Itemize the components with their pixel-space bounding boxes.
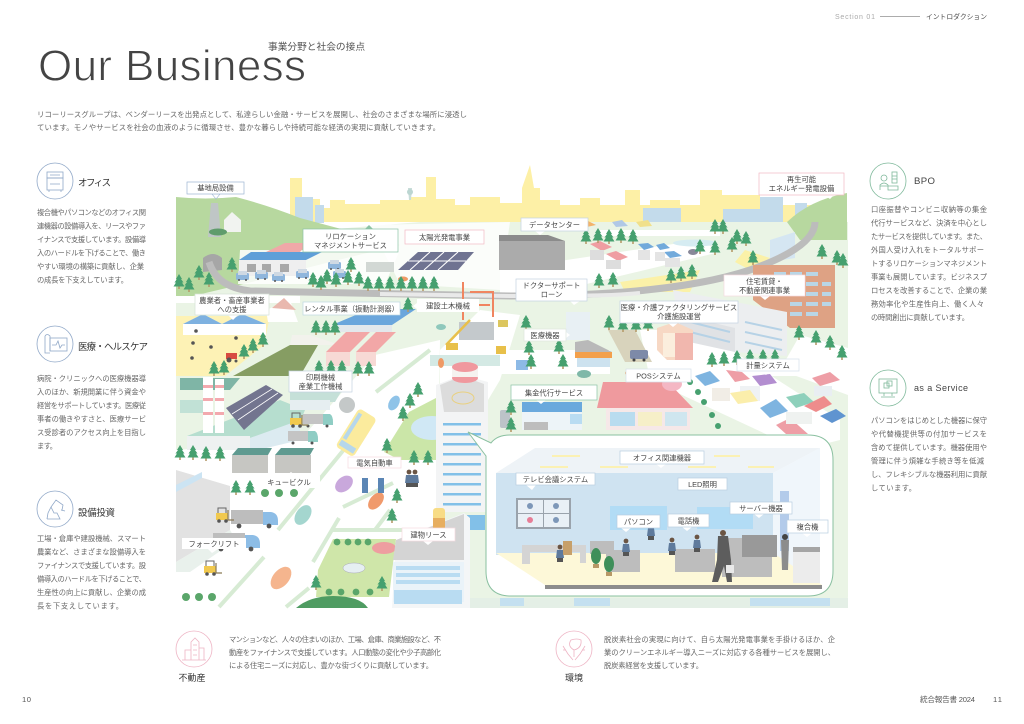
solar farm (398, 252, 474, 270)
panel: equipment investment: 設備投資 (78, 507, 115, 518)
label: EV (348, 457, 401, 472)
label: printing machinery: 印刷機械 (306, 373, 336, 382)
label: building lease (402, 528, 455, 545)
label: relocation: マネジメントサービス (314, 241, 387, 250)
footer: page numbers (22, 694, 1002, 704)
panel: BPO: の時間創出に貢献しています。 (871, 313, 969, 322)
panel: as a Service (870, 370, 988, 492)
floor (496, 553, 822, 585)
panel: medical: 入のほか、新規開業に伴う資金や (37, 388, 146, 396)
footer: page numbers: 統合報告書 2024 (920, 694, 975, 704)
label: factoring: 医療・介護ファクタリングサービス (621, 303, 737, 312)
panel: equipment investment: ファイナンスで支援しています。設 (37, 561, 147, 570)
label: PC: パソコン (624, 518, 653, 526)
panel: BPO: トするリロケーションマネジメント (871, 259, 987, 268)
cubicles (232, 448, 314, 473)
panel: environment: 業のクリーンエネルギー導入ニーズに対応する各種サービスを展開し、 (604, 648, 835, 657)
video wall (516, 498, 571, 529)
distant towers (295, 197, 807, 231)
label: building lease: 建物リース (410, 530, 447, 540)
icon: robot arm (37, 491, 73, 527)
label: cubicle: キュービクル (267, 478, 311, 487)
panel: real estate: 動産をファイナンスで支援しています。人口動態の変化や少子高齢化 (229, 648, 442, 657)
panel: as a Service: し、フレキシブルな機器利用に貢献 (871, 470, 988, 479)
panel: BPO (870, 163, 988, 322)
callout: office interior bubble (468, 432, 833, 596)
clinic (657, 322, 693, 360)
label: PC (617, 515, 660, 532)
left warehouse (176, 470, 236, 572)
label: relocation: リロケーション (325, 232, 376, 241)
forklifts (204, 413, 308, 576)
panel: BPO: 外国人受け入れをトータルサポー (871, 246, 984, 254)
panel: medical: 病院・クリニックへの医療機器導 (37, 374, 147, 383)
label: office equipment: オフィス関連機器 (633, 454, 692, 462)
label: construction machinery (413, 299, 479, 312)
label: doctor support loan (516, 279, 587, 305)
data center (499, 235, 565, 270)
park (182, 489, 396, 608)
label: telephone: 電話機 (678, 516, 700, 526)
label: multifunction printer (787, 520, 828, 537)
elevated highway (209, 222, 815, 296)
label: printing machinery: 産業工作機械 (299, 382, 343, 391)
panel: environment (556, 631, 836, 683)
label: collection agency: 集金代行サービス (525, 388, 583, 398)
label: renewable energy (759, 173, 844, 199)
label: medical equipment: 医療機器 (530, 331, 560, 340)
label: POS: POSシステム (636, 372, 681, 380)
panel: BPO: BPO (914, 176, 935, 187)
label: data center: データセンター (529, 220, 580, 230)
panel: as a Service: as a Service (914, 383, 968, 393)
vans (236, 260, 346, 282)
suburbs houses (576, 220, 795, 269)
base station tower and building (208, 203, 241, 237)
ground (176, 222, 848, 608)
green park by hospital (384, 398, 436, 460)
panel: office: 入のハードルを下げることで、働き (37, 248, 146, 258)
label: printing machinery (289, 371, 352, 392)
panel: as a Service: 管理に伴う煩雑な手続き等を低減 (871, 456, 985, 466)
icon: BPO worker (870, 163, 906, 199)
title: Our Business (38, 42, 306, 90)
panel: real estate (176, 631, 442, 683)
label: multifunction printer: 複合機 (797, 522, 819, 532)
label: server: サーバー機器 (739, 504, 784, 513)
label: housing: 住宅賃貸・ (746, 277, 783, 286)
label: rental: レンタル事業（振動計測器） (304, 304, 399, 314)
label: renewable energy: エネルギー発電設備 (769, 184, 835, 193)
label: factoring: 介護施設運営 (657, 312, 701, 321)
panel: equipment investment: 備導入のハードルを下げることで、 (37, 574, 146, 584)
label: POS (626, 369, 691, 382)
label: farmers (195, 294, 269, 320)
office plants (591, 548, 614, 576)
panel: equipment investment: 工場・倉庫や建設機械、スマート (37, 534, 146, 543)
panel: as a Service: 含めて提供しています。機器使用や (871, 443, 987, 452)
label: housing: 不動産関連事業 (739, 286, 791, 295)
intro text: リコーリースグループは、ベンダーリースを出発点として、私達らしい金融・サービスを展開し、社会のさまざまな場所に浸透し (37, 110, 467, 119)
label: cubicle (258, 472, 320, 488)
panel: BPO: 務効率化や生産性向上、働く人々 (871, 300, 984, 308)
label: doctor support loan: ローン (541, 290, 562, 299)
skyline (290, 165, 820, 222)
office workers (556, 523, 789, 582)
label: solar (405, 230, 484, 244)
panel: office: オフィス (78, 177, 111, 188)
label: solar: 太陽光発電事業 (419, 233, 471, 242)
tractor and cows (190, 329, 238, 362)
header: section label (835, 12, 987, 21)
label: doctor support loan: ドクターサポート (523, 281, 580, 290)
label: medical equipment (524, 329, 570, 341)
panel: BPO: 口座振替やコンビニ収納等の集金 (871, 205, 988, 214)
nursing apartment blocks (673, 290, 787, 356)
right wall (773, 448, 820, 585)
panel: environment: 脱炭素社会の実現に向けて、自ら太陽光発電事業を手掛けるほか、企 (604, 635, 836, 644)
label: data center (521, 218, 588, 235)
back wall (496, 473, 773, 555)
panel: office (37, 163, 147, 284)
panel: BPO: 代行サービスなど、決済を中心とし (871, 218, 987, 228)
windows (610, 506, 753, 530)
ceiling (496, 448, 820, 473)
label: farmers: への支援 (217, 305, 247, 314)
label: office equipment (620, 451, 704, 468)
panel: medical: 経営をサポートしています。医療従 (37, 401, 147, 410)
label: LED: LED照明 (688, 480, 717, 489)
icon: medical monitor (37, 326, 73, 362)
people (405, 470, 419, 487)
panel: office: イナンスで支援しています。設備導 (37, 235, 147, 244)
tunnel (203, 254, 222, 272)
icon: buildings (176, 631, 212, 667)
construction site (430, 282, 508, 366)
farm land (176, 298, 340, 376)
small clinic (566, 312, 590, 340)
EV chargers (362, 478, 384, 493)
icon: copier (37, 163, 73, 199)
label: relocation (303, 225, 398, 252)
panel: real estate: 不動産 (178, 672, 206, 683)
trees (174, 219, 848, 591)
subtitle: 事業分野と社会の接点 (268, 40, 365, 53)
label: base station (187, 182, 244, 199)
hills (176, 197, 400, 300)
panel: as a Service: しています。 (871, 484, 916, 492)
convenience store (575, 340, 612, 367)
panel: environment: 脱炭素経営を支援しています。 (604, 661, 703, 670)
yellow plots (620, 270, 700, 292)
brick apartment (753, 265, 835, 328)
white plots and roads (176, 222, 848, 608)
desks and partitions (522, 535, 820, 583)
label: farmers: 農業者・畜産事業者 (199, 296, 265, 305)
label: construction machinery: 建設土木機械 (426, 302, 471, 310)
panel: real estate: による住宅ニーズに対応し、豊かな街づくりに貢献しています。 (229, 661, 433, 670)
panel: BPO: 事業も展開しています。ビジネスプ (871, 272, 988, 282)
panel: medical: 事者の働きやすさと、医療サービ (37, 414, 146, 424)
label: metering (737, 359, 799, 375)
label: video conference: テレビ会議システム (523, 475, 588, 484)
label: renewable energy: 再生可能 (787, 175, 817, 184)
label: forklift: フォークリフト (188, 540, 240, 548)
label: metering: 計量システム (746, 361, 790, 370)
label: LED (678, 478, 727, 490)
pink factories (326, 332, 396, 366)
header: section label: Section 01 (835, 14, 875, 21)
label: housing (724, 275, 805, 300)
trucks (213, 414, 333, 551)
illustration: city map (174, 165, 848, 608)
panel: as a Service: や代替機提供等の付加サービスを (871, 430, 987, 438)
panel: office: の成長を下支えしています。 (37, 276, 128, 284)
road stripes (219, 350, 436, 607)
header: section label: イントロダクション (926, 12, 987, 21)
hospital tower (436, 362, 488, 530)
row houses (695, 370, 846, 434)
label: video conference (516, 473, 595, 490)
cars (267, 249, 698, 593)
label: telephone (668, 514, 709, 531)
panel: office: 連機器の設備導入を、リースやファ (37, 222, 146, 230)
intro text (37, 110, 467, 132)
leased building (392, 508, 470, 608)
panel: BPO: ロセスを改善することで、企業の業 (871, 286, 988, 295)
label: EV: 電気自動車 (356, 458, 393, 468)
panel: environment: 環境 (565, 672, 583, 683)
panel: medical: 医療・ヘルスケア (78, 341, 148, 352)
panel: equipment investment: 農業など、さまざまな設備導入を (37, 548, 146, 556)
shopping store (597, 377, 721, 430)
label: base station: 基地局設備 (197, 184, 234, 192)
bottom strip (440, 598, 848, 608)
parking and lawn (608, 330, 652, 362)
intro text: ています。モノやサービスを社会の血液のように循環させ、豊かな暮らしや持続可能な経済の実現に貢献していきます。 (37, 123, 440, 132)
label: forklift (182, 538, 246, 553)
panel: BPO: たサービスを提供しています。また、 (871, 232, 987, 241)
panel: office: 複合機やパソコンなどのオフィス関 (37, 208, 146, 217)
panel: medical: ス受診者のアクセス向上を目指し (37, 428, 146, 437)
label: factoring (620, 301, 738, 327)
icon: monitor (870, 370, 906, 406)
panel: equipment investment: 生産性の向上に貢献し、企業の成 (37, 588, 146, 597)
warehouse (239, 243, 322, 276)
panel: real estate: マンションなど、人々の住まいのほか、工場、倉庫、商業施設など、不 (229, 635, 441, 644)
rental warehouse (332, 309, 416, 332)
panel: medical (37, 326, 148, 450)
label: server (730, 502, 792, 518)
collection center building (522, 402, 582, 430)
footer: page numbers: 11 (993, 695, 1002, 704)
label: collection agency (511, 385, 597, 404)
icon: hands and leaf (556, 631, 592, 667)
panel: equipment investment (37, 491, 147, 610)
label: rental (303, 302, 400, 315)
panel: as a Service: パソコンをはじめとした機器に保守 (871, 416, 987, 425)
footer: page numbers: 10 (22, 695, 31, 704)
factory (180, 377, 355, 452)
panel: equipment investment: 長を下支えしています。 (37, 602, 123, 610)
bus (335, 408, 377, 457)
panel: medical: ます。 (37, 442, 57, 450)
panel: office: やすい環境の構築に貢献し、企業 (37, 262, 145, 271)
